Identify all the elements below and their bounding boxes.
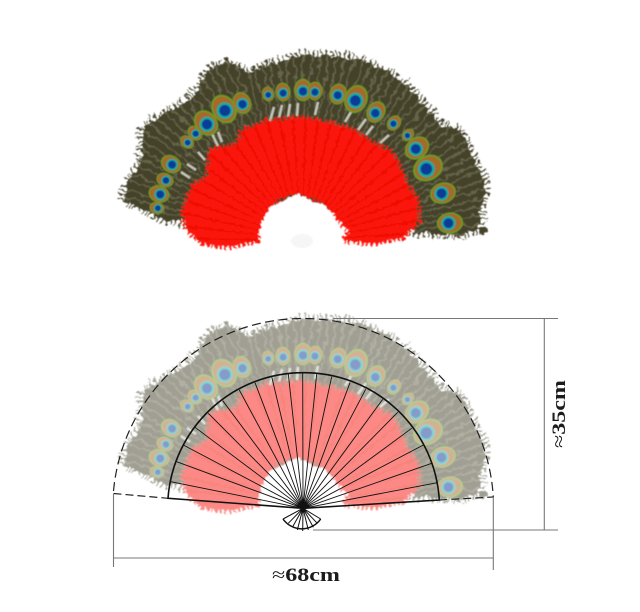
width label: ≈68cm (272, 565, 340, 586)
fan handle (291, 234, 313, 248)
ribs (171, 373, 437, 508)
pale gaps between feathers and red plumes (181, 102, 389, 178)
peacock feather fan photo (124, 55, 485, 248)
width dimension lines (114, 494, 493, 570)
small handle fan (283, 508, 321, 531)
peacock eyes (146, 79, 464, 235)
dashed base lines (114, 494, 493, 500)
inner arc and base (168, 373, 439, 508)
red marabou plumes (183, 118, 418, 247)
fan rib diagram (114, 318, 493, 531)
faded fan photo in dimension diagram (124, 319, 485, 512)
height dimension lines (313, 318, 558, 530)
outer dashed arc (114, 318, 493, 497)
height label: ≈35cm (549, 380, 570, 448)
dark peacock feather band (124, 55, 485, 240)
white fan base plumes (259, 194, 345, 247)
